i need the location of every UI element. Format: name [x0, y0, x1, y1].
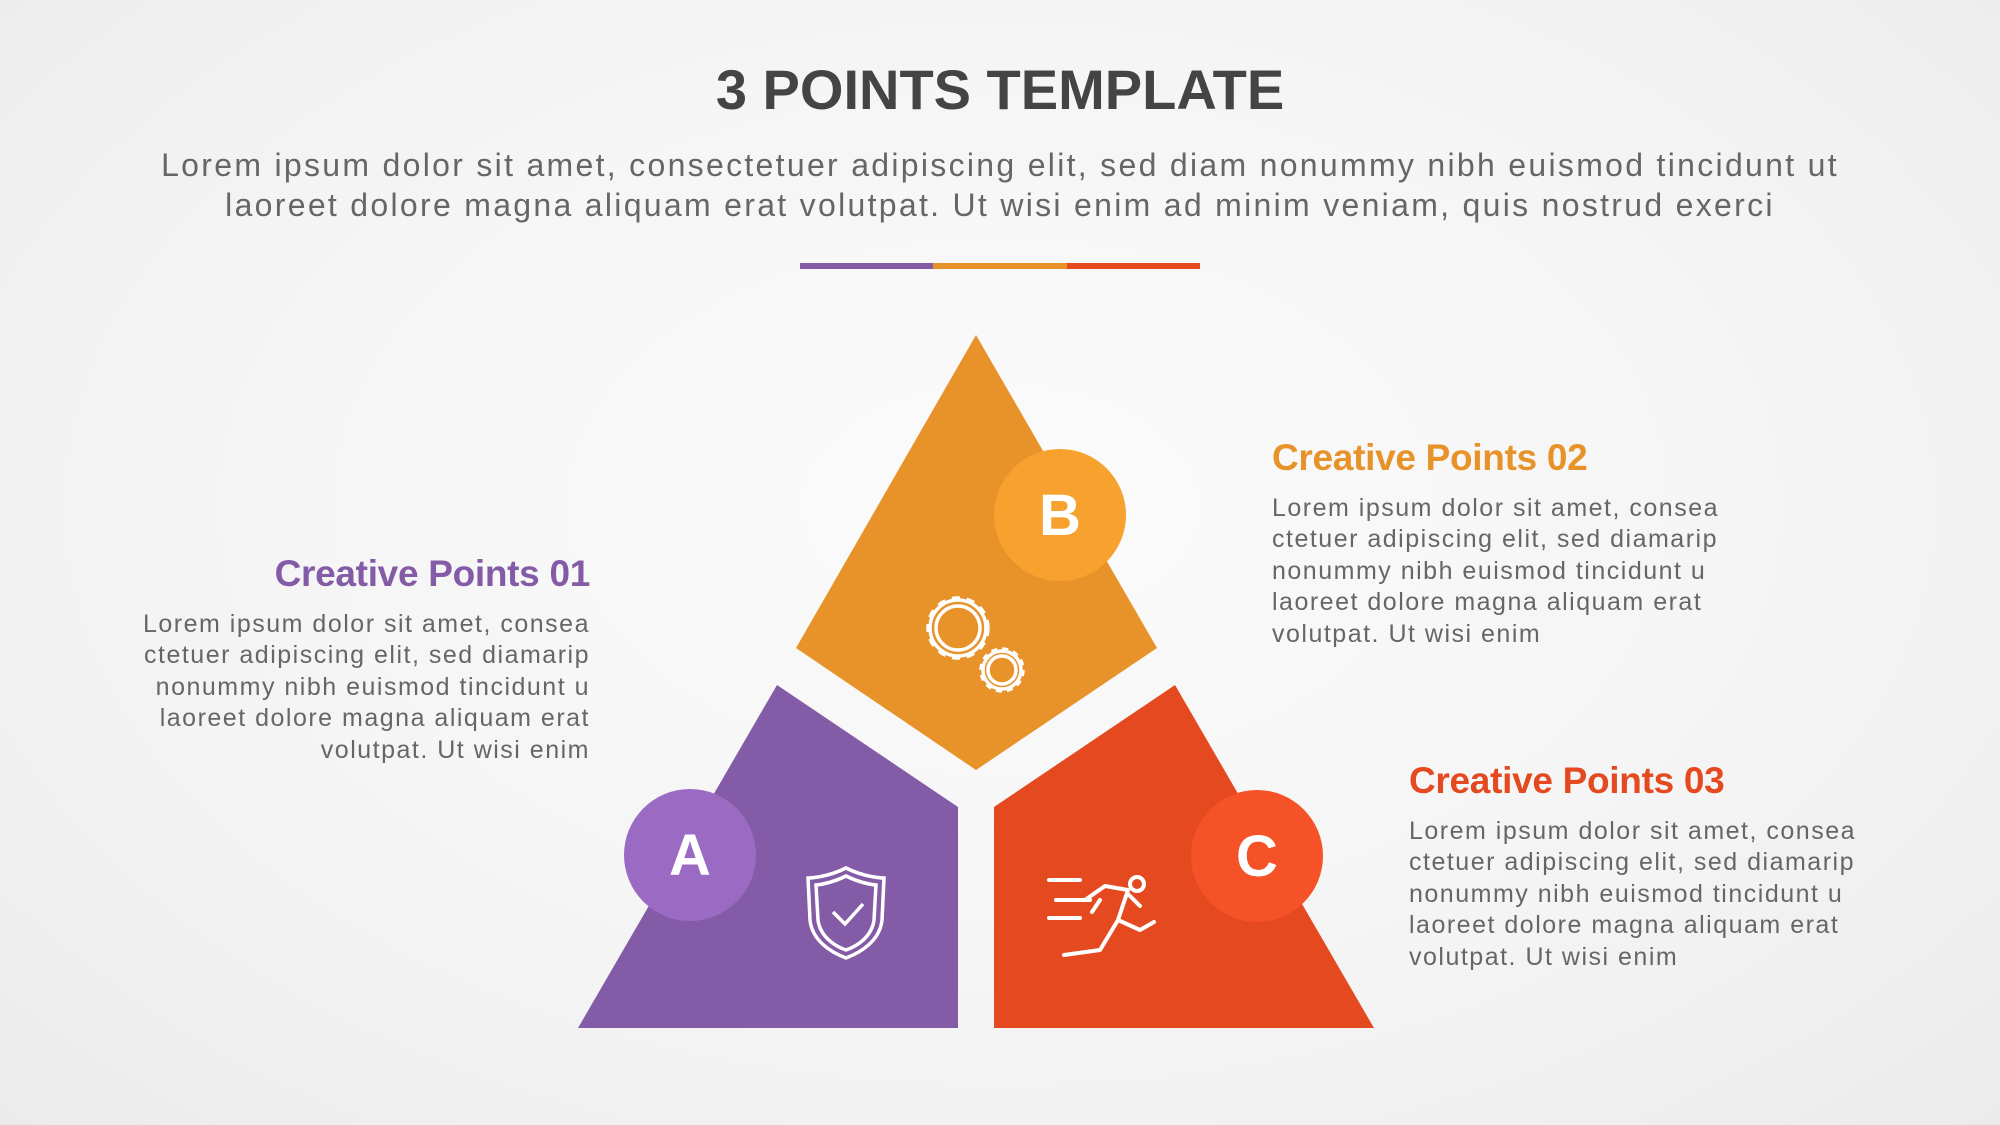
- icon: runner: [1049, 877, 1154, 955]
- body 03: volutpat. Ut wisi enim: [1409, 943, 1678, 971]
- body 03: nonummy nibh euismod tincidunt u: [1409, 880, 1843, 908]
- heading 02: Creative Points 02: [1272, 437, 1587, 478]
- badge B: [994, 449, 1126, 581]
- subtitle: laoreet dolore magna aliquam erat volutpat. Ut wisi enim ad minim veniam, quis nostrud exerci: [225, 187, 1775, 223]
- icon: shield: [808, 868, 884, 958]
- segment B: [796, 335, 1157, 770]
- body 03: Lorem ipsum dolor sit amet, consea: [1409, 817, 1856, 845]
- text block: point 01: [143, 553, 590, 764]
- text block: point 03: [1409, 760, 1856, 971]
- body 02: ctetuer adipiscing elit, sed diamarip: [1272, 525, 1718, 553]
- heading 03: Creative Points 03: [1409, 760, 1724, 801]
- badge C: C: [1236, 824, 1278, 889]
- body 02: laoreet dolore magna aliquam erat: [1272, 588, 1702, 616]
- body 02: nonummy nibh euismod tincidunt u: [1272, 557, 1706, 585]
- body 02: volutpat. Ut wisi enim: [1272, 620, 1541, 648]
- badge B: B: [1039, 483, 1081, 548]
- body 01: nonummy nibh euismod tincidunt u: [156, 673, 590, 701]
- text block: point 02: [1272, 437, 1719, 648]
- body 03: ctetuer adipiscing elit, sed diamarip: [1409, 848, 1855, 876]
- body 03: laoreet dolore magna aliquam erat: [1409, 911, 1839, 939]
- badge A: [624, 789, 756, 921]
- body 02: [1272, 494, 1719, 648]
- body 01: Lorem ipsum dolor sit amet, consea: [143, 610, 590, 638]
- title: 3 POINTS TEMPLATE: [716, 58, 1284, 121]
- body 01: volutpat. Ut wisi enim: [321, 736, 590, 764]
- badge C: [1191, 790, 1323, 922]
- heading 01: Creative Points 01: [275, 553, 590, 594]
- segment A: [578, 685, 958, 1028]
- divider bar: [800, 263, 1200, 269]
- segment C: [994, 685, 1374, 1028]
- body 01: laoreet dolore magna aliquam erat: [160, 704, 590, 732]
- subtitle: [161, 147, 1839, 223]
- icon: gears: [928, 598, 1023, 691]
- body 02: Lorem ipsum dolor sit amet, consea: [1272, 494, 1719, 522]
- body 01: ctetuer adipiscing elit, sed diamarip: [144, 641, 590, 669]
- badge A: A: [669, 823, 711, 888]
- body 03: [1409, 817, 1856, 971]
- body 01: [143, 610, 590, 764]
- subtitle: Lorem ipsum dolor sit amet, consectetuer adipiscing elit, sed diam nonummy nibh euismod tincidunt ut: [161, 147, 1839, 183]
